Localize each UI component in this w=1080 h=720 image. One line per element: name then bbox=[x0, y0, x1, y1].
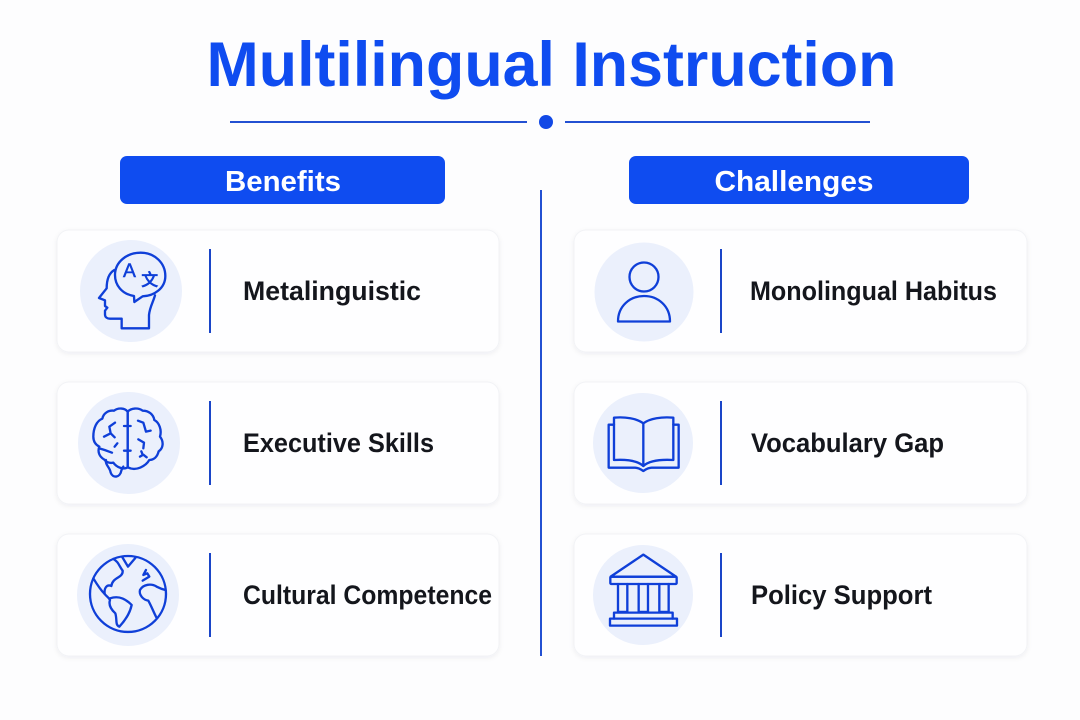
card: monolingual habitus bbox=[574, 230, 1027, 352]
icon: head with translation bubble: 文 bbox=[141, 271, 158, 290]
card: metalinguistic bbox=[57, 230, 499, 352]
card: vocabulary gap bbox=[574, 382, 1027, 504]
card: cultural competence: Cultural Competence bbox=[243, 580, 492, 610]
title: Multilingual Instruction bbox=[206, 30, 896, 100]
card: metalinguistic: Metalinguistic bbox=[243, 276, 421, 306]
card: executive skills: Executive Skills bbox=[243, 428, 434, 458]
card: vocabulary gap: Vocabulary Gap bbox=[751, 428, 944, 458]
icon: person bbox=[618, 262, 670, 322]
heading: benefits: Benefits bbox=[225, 166, 341, 198]
icon: head with translation bubble: A bbox=[123, 261, 136, 282]
icon: globe bbox=[90, 556, 166, 632]
icon: head with translation bubble bbox=[99, 253, 165, 328]
icon: open book bbox=[609, 417, 679, 471]
icon: brain bbox=[93, 409, 163, 477]
heading: challenges: Challenges bbox=[714, 166, 874, 198]
title divider with dot bbox=[230, 115, 870, 129]
center column divider bbox=[540, 190, 542, 656]
heading: benefits bbox=[120, 156, 445, 204]
card: policy support bbox=[574, 534, 1027, 656]
panel: challenges bbox=[574, 156, 1027, 656]
card: policy support: Policy Support bbox=[751, 580, 932, 610]
heading: challenges bbox=[629, 156, 969, 204]
card: cultural competence bbox=[57, 534, 499, 656]
panel: benefits bbox=[57, 156, 499, 656]
icon: institution building bbox=[610, 555, 677, 626]
card: monolingual habitus: Monolingual Habitus bbox=[750, 276, 997, 306]
card: executive skills bbox=[57, 382, 499, 504]
